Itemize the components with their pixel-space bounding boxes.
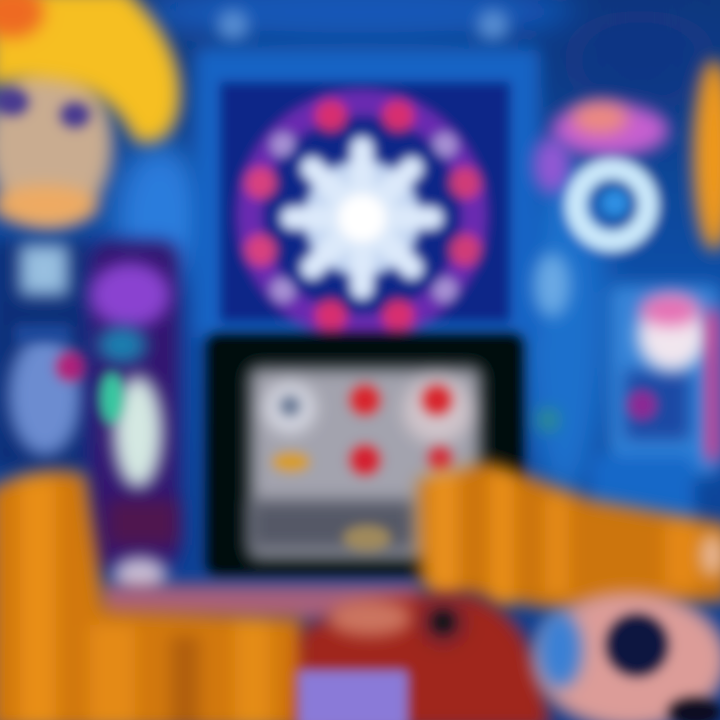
- panel: tablet slot machine: [205, 332, 525, 577]
- wheel ring: [245, 100, 481, 331]
- character: yellow hair and face: [0, 0, 179, 225]
- orange stripes left: [0, 471, 330, 720]
- panel: left column: [0, 240, 180, 593]
- goggles character: [534, 533, 720, 720]
- red figure: [295, 594, 550, 720]
- wheel snowflake: [292, 148, 432, 288]
- orange stripes right: [418, 462, 720, 610]
- icon: right ring logo: [534, 60, 720, 250]
- slot symbols: [272, 384, 453, 551]
- panel: wheel frame: [195, 48, 540, 338]
- panel: right machine: [534, 253, 720, 525]
- transition band above the bottom orange: [100, 585, 420, 620]
- slot screen: [250, 368, 480, 558]
